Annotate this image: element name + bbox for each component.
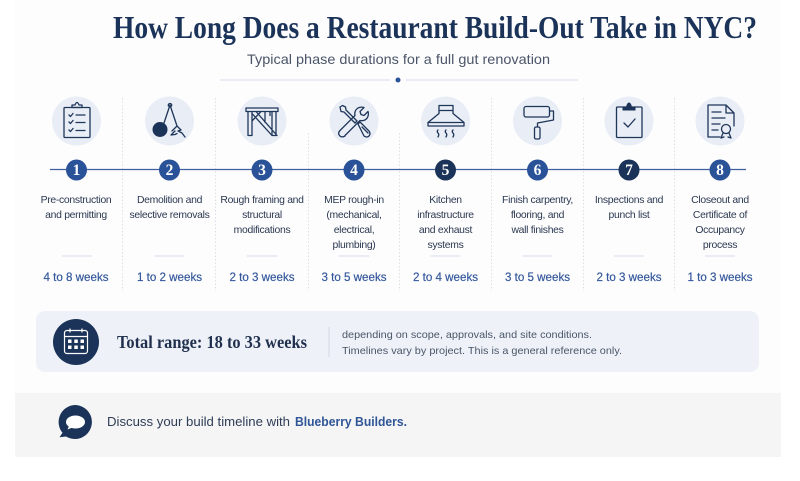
- duration: 3 to 5 weeks: [321, 271, 387, 284]
- rule: [614, 255, 644, 257]
- phase 5 column: [413, 96, 478, 284]
- phase 3 column: [220, 96, 304, 284]
- icon: wrecking ball: [145, 96, 194, 146]
- footer call to action: [15, 393, 781, 457]
- step number 4: 4: [350, 162, 358, 179]
- phase label: Rough framing and: [220, 195, 304, 206]
- icon: certificate document: [696, 96, 744, 146]
- icon: speech bubble: [59, 405, 92, 439]
- phase label: infrastructure: [417, 210, 474, 221]
- icon: kitchen exhaust hood: [421, 96, 470, 146]
- rule: [430, 255, 460, 257]
- step number 6: 6: [534, 162, 542, 179]
- phase label: Kitchen: [429, 195, 462, 206]
- timeline line: [50, 168, 746, 170]
- step number 2: [159, 160, 180, 180]
- duration: 1 to 3 weeks: [687, 271, 753, 284]
- duration: 3 to 5 weeks: [505, 271, 570, 284]
- panel: total range: [36, 311, 759, 372]
- phase label: MEP rough-in: [324, 195, 384, 206]
- phase 6 column: [502, 96, 573, 284]
- rule: [522, 255, 552, 257]
- phase label: Demolition and: [137, 195, 203, 206]
- rule: [154, 255, 184, 257]
- duration: 1 to 2 weeks: [137, 271, 202, 284]
- footer text: Discuss your build timeline with: [107, 414, 290, 429]
- duration: 2 to 3 weeks: [229, 271, 295, 284]
- duration: 4 to 8 weeks: [43, 271, 109, 284]
- duration: 2 to 4 weeks: [413, 271, 478, 284]
- icon: calendar: [53, 319, 99, 365]
- phase label: Finish carpentry,: [502, 195, 573, 206]
- phase label: punch list: [609, 210, 650, 221]
- rule: [62, 255, 92, 257]
- phase 4 column: [321, 96, 387, 284]
- phase label: Inspections and: [595, 195, 664, 206]
- phase label: (mechanical,: [326, 210, 382, 221]
- subtitle: Typical phase durations for a full gut renovation: [247, 51, 550, 67]
- phase label: Pre-construction: [41, 195, 112, 206]
- total range heading: Total range: 18 to 33 weeks: [117, 332, 307, 352]
- step number 1: 1: [73, 162, 80, 179]
- phase 8 column: [687, 96, 753, 284]
- total range note: depending on scope, approvals, and site conditions.: [342, 329, 592, 341]
- rule: [247, 255, 277, 257]
- phase label: and permitting: [45, 210, 107, 221]
- step number 6: [527, 160, 548, 180]
- step number 7: 7: [625, 162, 633, 179]
- phase label: and exhaust: [419, 225, 473, 236]
- phase label: selective removals: [129, 210, 210, 221]
- step number 3: 3: [258, 162, 266, 179]
- step number 4: [344, 160, 364, 180]
- icon: checklist clipboard: [52, 96, 101, 146]
- icon: rough framing: [238, 96, 286, 146]
- duration: 2 to 3 weeks: [596, 271, 662, 284]
- icon: paint roller: [513, 96, 562, 146]
- phase label: wall finishes: [510, 225, 564, 236]
- rule: [339, 255, 369, 257]
- step number 3: [252, 160, 272, 180]
- phase label: Occupancy: [695, 225, 746, 236]
- step number 5: 5: [442, 162, 450, 179]
- phase 1 column: [41, 96, 112, 284]
- phase label: Closeout and: [691, 195, 749, 206]
- phase label: flooring, and: [511, 210, 565, 221]
- icon: inspection clipboard: [604, 96, 654, 146]
- phase label: process: [703, 240, 737, 251]
- phase 7 column: [595, 96, 664, 284]
- step number 2: 2: [166, 162, 174, 179]
- rule: [705, 255, 735, 257]
- step number 1: [66, 160, 87, 180]
- title divider with dot: [220, 78, 578, 82]
- footer text: Blueberry Builders.: [295, 414, 407, 429]
- phase label: electrical,: [334, 225, 374, 236]
- total range note: Timelines vary by project. This is a general reference only.: [342, 345, 622, 357]
- step number 5: [435, 160, 456, 180]
- icon: crossed screwdriver and wrench: [330, 96, 378, 146]
- phase label: plumbing): [333, 240, 375, 251]
- phase label: modifications: [234, 225, 290, 236]
- step number 8: [710, 160, 730, 180]
- phase label: systems: [427, 240, 464, 251]
- phase 2 column: [129, 96, 210, 284]
- phase label: Certificate of: [693, 210, 747, 221]
- step number 8: 8: [716, 162, 724, 179]
- phase label: structural: [242, 210, 282, 221]
- step number 7: [618, 160, 640, 180]
